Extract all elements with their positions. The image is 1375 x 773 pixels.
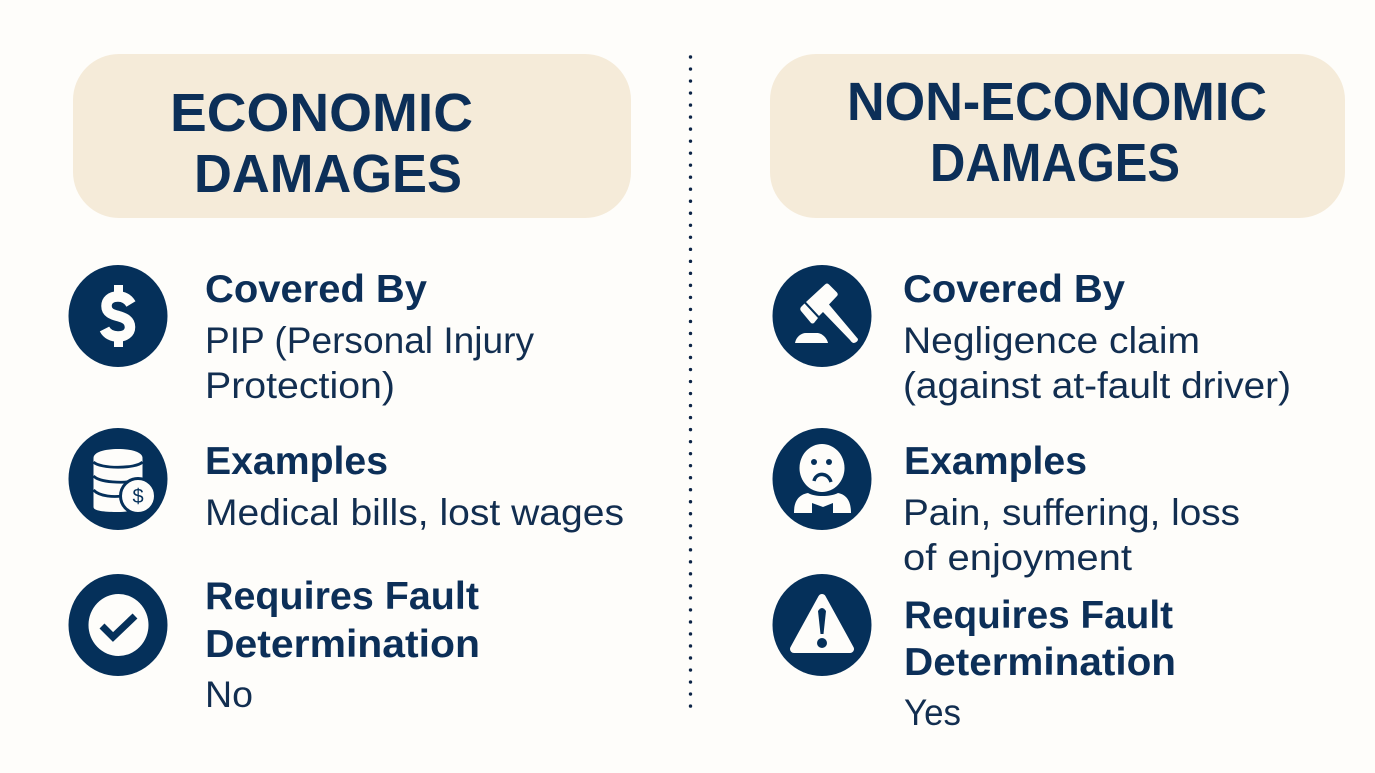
- icon: check mark: [68, 574, 168, 676]
- panel: non-economic damages heading: NON-ECONOMIC: [847, 72, 1267, 132]
- panel: non-economic damages heading: DAMAGES: [930, 133, 1180, 193]
- text: requires fault, non-economic: Determination: [904, 641, 1176, 684]
- text: requires fault, economic: No: [205, 674, 253, 715]
- text: requires fault, non-economic: Yes: [904, 692, 961, 733]
- text: covered by, non-economic: (against at-fault driver): [903, 365, 1291, 406]
- icon: coin stack: $: [132, 486, 144, 508]
- text: covered by, economic: PIP (Personal Injury: [205, 320, 534, 361]
- text: covered by, non-economic: [903, 268, 1291, 406]
- text: requires fault, economic: Requires Fault: [205, 575, 479, 618]
- panel: economic damages heading: DAMAGES: [194, 144, 462, 204]
- text: examples, economic: [205, 440, 624, 533]
- panel: economic damages heading: ECONOMIC: [170, 83, 473, 143]
- text: requires fault, non-economic: Requires Fault: [904, 594, 1173, 637]
- panel: economic damages heading: [73, 54, 631, 218]
- text: covered by, economic: [205, 268, 534, 406]
- text: requires fault, non-economic: [904, 594, 1176, 733]
- panel: non-economic damages heading: [770, 54, 1345, 218]
- icon: coin stack: [68, 428, 168, 530]
- icon: sad face person: [772, 428, 872, 530]
- text: examples, non-economic: [903, 440, 1240, 578]
- text: covered by, non-economic: Negligence claim: [903, 320, 1200, 361]
- text: requires fault, economic: [205, 575, 480, 715]
- text: covered by, economic: Covered By: [205, 268, 428, 311]
- text: examples, economic: Medical bills, lost wages: [205, 492, 624, 533]
- text: examples, non-economic: of enjoyment: [903, 537, 1133, 578]
- icon: warning triangle: [772, 574, 872, 676]
- icon: dollar sign: [68, 265, 168, 367]
- text: examples, non-economic: Examples: [904, 440, 1087, 483]
- text: examples, economic: Examples: [205, 440, 388, 483]
- text: covered by, economic: Protection): [205, 365, 395, 406]
- text: covered by, non-economic: Covered By: [903, 268, 1126, 311]
- text: examples, non-economic: Pain, suffering, loss: [903, 492, 1240, 533]
- text: requires fault, economic: Determination: [205, 623, 480, 666]
- icon: gavel: [772, 265, 872, 367]
